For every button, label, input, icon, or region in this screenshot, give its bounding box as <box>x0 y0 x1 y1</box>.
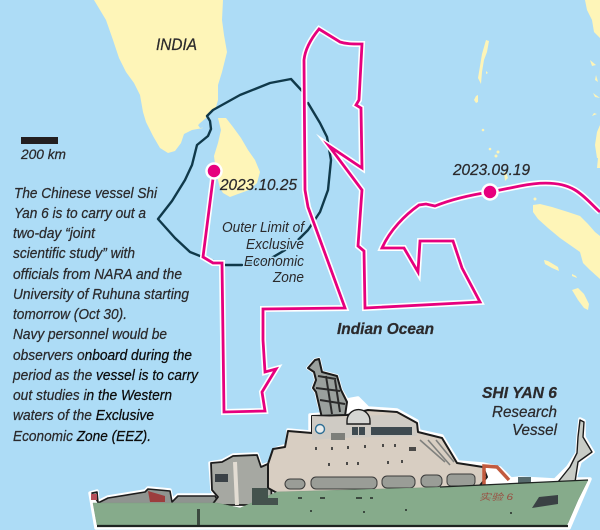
text block: description: period as the vessel is to carry <box>12 367 199 384</box>
label: date 2023.10.25: 2023.10.25 <box>219 177 297 194</box>
scale bar: 200 km <box>20 146 66 162</box>
label: date 2023.09.19: 2023.09.19 <box>452 162 530 179</box>
label: vessel name: Research <box>492 404 557 421</box>
label: outer limit of Exclusive Economic Zone: Zone <box>272 269 304 286</box>
line: outer limit of Exclusive Economic Zone <box>158 79 331 265</box>
scale bar <box>20 137 66 162</box>
Palk Strait notch <box>198 119 210 128</box>
text block: description: Navy personnel would be <box>13 326 167 343</box>
label: outer limit of Exclusive Economic Zone <box>222 219 306 286</box>
crane <box>484 466 509 485</box>
label: vessel name <box>482 385 557 439</box>
forward mast <box>558 420 592 482</box>
mast and radar tower <box>308 359 347 418</box>
text block: description: Economic Zone (EEZ). <box>13 428 151 445</box>
land: Sumatra <box>533 204 600 279</box>
marker: 2023.09.19 position <box>482 184 498 200</box>
hull deck edge <box>440 480 588 487</box>
label: Indian Ocean: Indian Ocean <box>337 321 434 338</box>
radar dome <box>347 410 370 424</box>
text block: description: Yan 6 is to carry out a <box>14 205 146 222</box>
main superstructure <box>268 410 487 493</box>
aft deck equipment <box>92 489 220 505</box>
aft superstructure <box>211 455 272 505</box>
hull <box>93 480 588 526</box>
label: outer limit of Exclusive Economic Zone: Economic <box>244 253 304 270</box>
label: vessel name: Vessel <box>512 422 557 439</box>
land masses <box>94 0 600 310</box>
forward superstructure stripes <box>420 440 454 465</box>
hull markings <box>197 497 512 525</box>
hull waterline <box>97 525 568 527</box>
text block: description: officials from NARA and the <box>13 266 182 283</box>
ship halo <box>90 359 593 528</box>
text block: description: The Chinese vessel Shi <box>14 185 158 202</box>
promenade deck openings <box>285 474 475 489</box>
marker: 2023.10.25 position <box>206 164 222 178</box>
text block: description: scientific study” with <box>13 245 135 262</box>
label: vessel name: SHI YAN 6 <box>482 385 557 402</box>
label: outer limit of Exclusive Economic Zone: Outer Limit of <box>222 219 306 236</box>
text block: description: tomorrow (Oct 30). <box>13 306 127 323</box>
vessel name on hull: 实验 6 <box>479 492 513 502</box>
land: India <box>94 0 227 153</box>
text block: description <box>12 185 199 445</box>
text block: description: waters of the Exclusive <box>13 407 154 424</box>
foredeck gear <box>518 477 531 483</box>
label: outer limit of Exclusive Economic Zone: Exclusive <box>246 236 304 253</box>
hull window <box>532 495 558 508</box>
line: vessel route <box>203 29 600 412</box>
aft block shadow on hull <box>252 488 278 505</box>
land: Sri Lanka <box>214 118 260 197</box>
illustration: research vessel Shi Yan 6 <box>90 359 593 528</box>
text block: description: out studies in the Western <box>13 387 172 404</box>
land: Andaman and Nicobar islands <box>474 40 508 181</box>
portholes <box>315 444 416 466</box>
bridge deck <box>312 414 417 440</box>
text block: description: University of Ruhuna starting <box>13 286 190 303</box>
label: India: INDIA <box>156 35 197 54</box>
land: Malay Peninsula and Thai coast <box>585 0 600 168</box>
land: small islands near Sumatra <box>534 198 589 310</box>
funnel logo <box>316 424 324 434</box>
text block: description: two-day “joint <box>13 225 96 242</box>
text block: description: observers onboard during the <box>13 347 192 364</box>
